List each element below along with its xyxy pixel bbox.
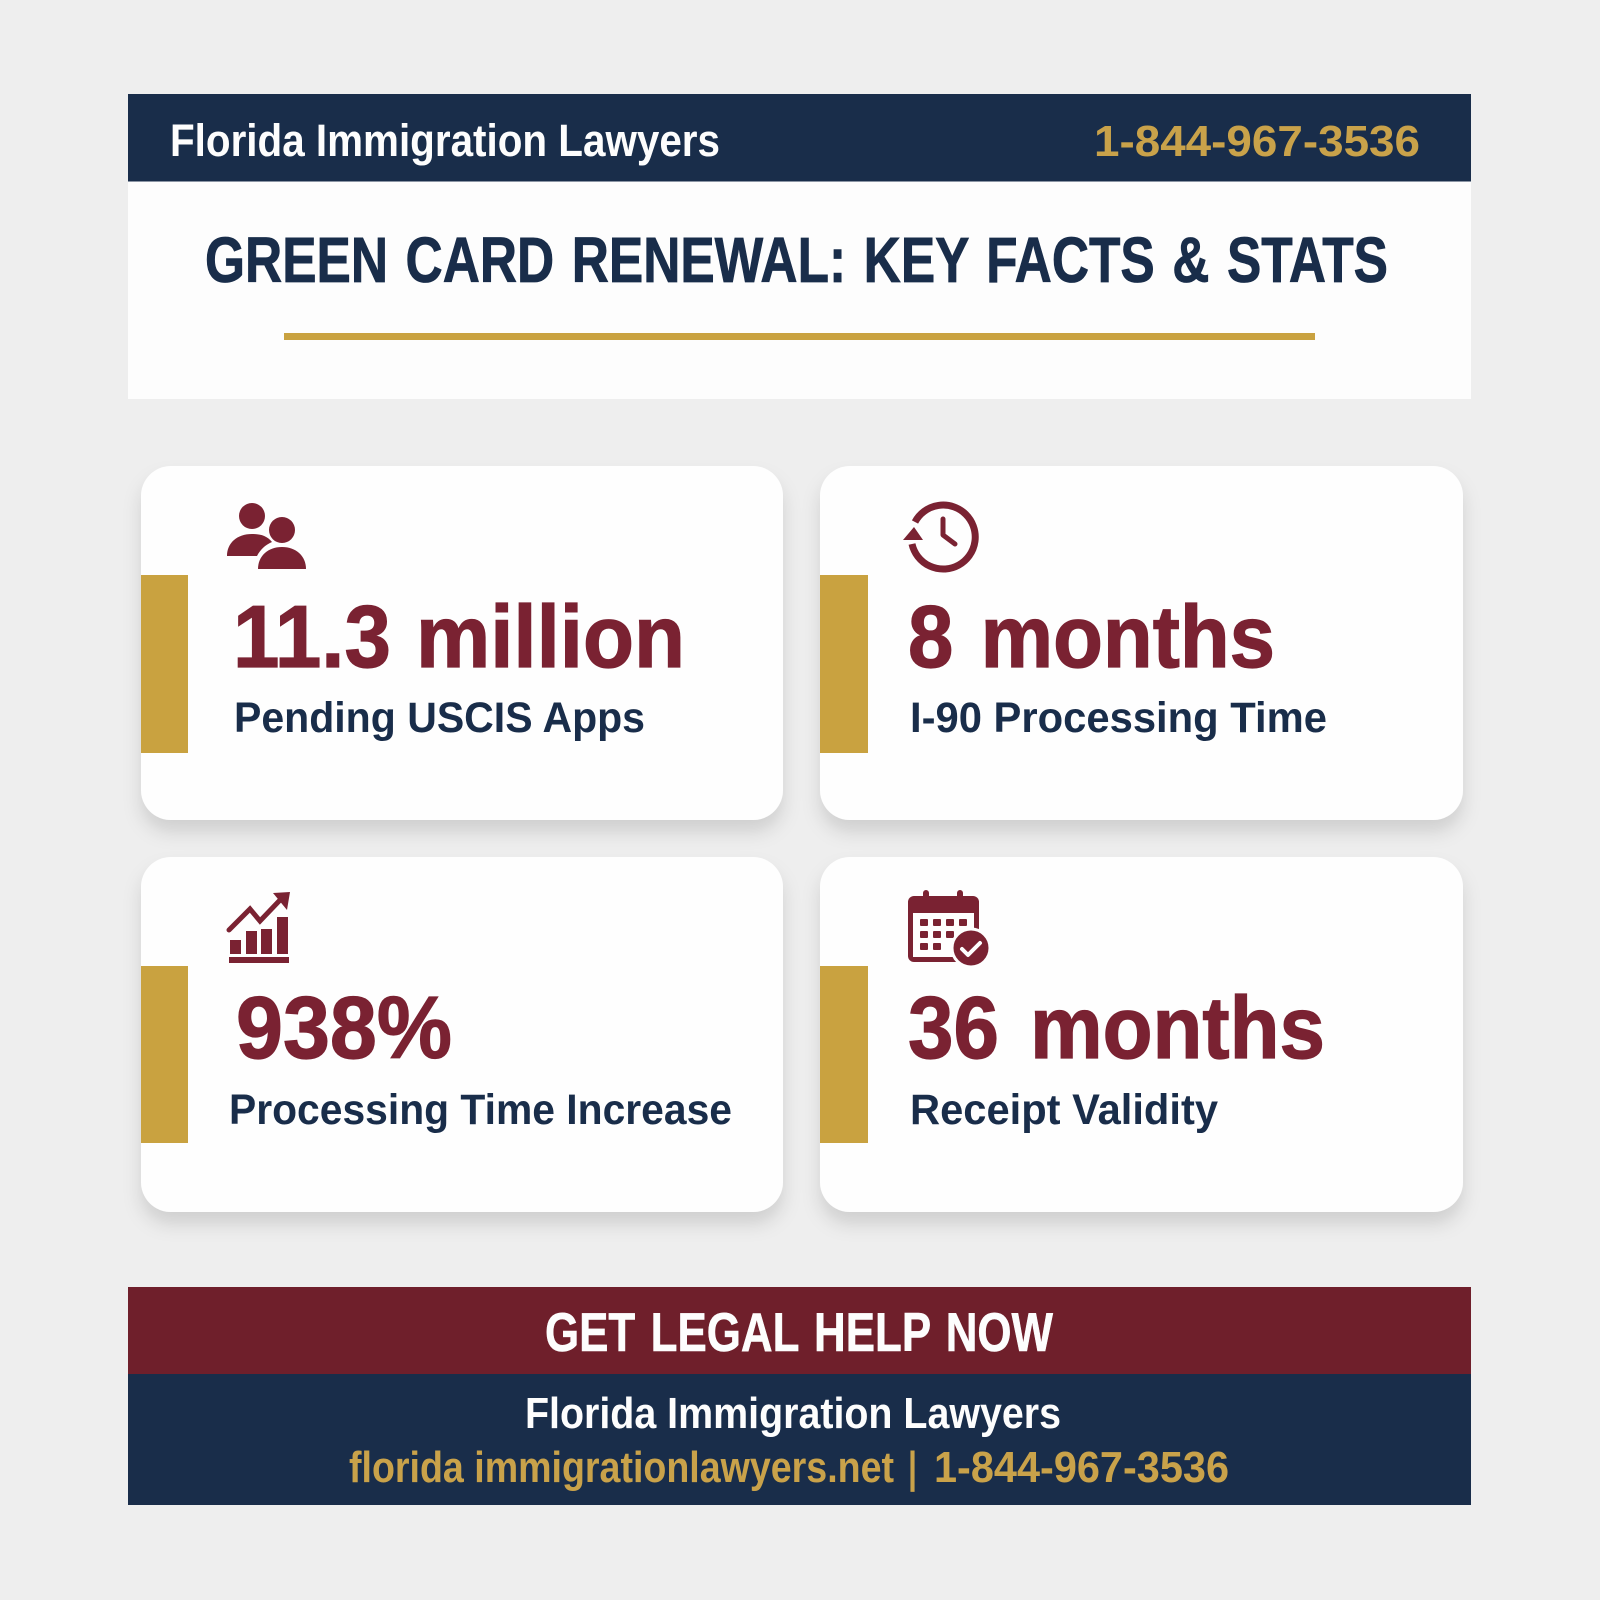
icon: people <box>227 503 306 569</box>
title underline <box>284 333 1315 340</box>
footer call to action <box>128 1287 1471 1505</box>
card: pending apps <box>141 466 783 820</box>
header bar <box>128 94 1471 182</box>
label: Processing Time Increase <box>229 1086 732 1134</box>
label: Receipt Validity <box>910 1086 1218 1134</box>
label: I-90 Processing Time <box>910 694 1327 742</box>
firm name: Florida Immigration Lawyers <box>525 1389 1061 1438</box>
contact line: | <box>908 1443 917 1493</box>
firm name: Florida Immigration Lawyers <box>170 115 720 166</box>
card: time increase <box>141 857 783 1212</box>
card: receipt validity <box>820 857 1463 1212</box>
stat: 11.3 million <box>233 587 685 686</box>
phone number: 1-844-967-3536 <box>1094 117 1420 166</box>
title panel <box>128 182 1471 399</box>
label: Pending USCIS Apps <box>234 694 645 742</box>
icon: calendar with check <box>908 890 990 967</box>
stat: 36 months <box>908 978 1325 1077</box>
stat: 938% <box>236 978 452 1077</box>
contact line: 1-844-967-3536 <box>934 1443 1229 1492</box>
top header panel <box>128 94 1471 182</box>
cta heading: GET LEGAL HELP NOW <box>545 1301 1053 1363</box>
card: processing time <box>820 466 1463 820</box>
navy band <box>128 1374 1471 1505</box>
red band <box>128 1287 1471 1374</box>
icon: rising chart <box>229 892 290 963</box>
stat: 8 months <box>908 587 1275 686</box>
icon: clock with arrow <box>903 505 975 569</box>
contact line: florida immigrationlawyers.net <box>349 1443 894 1492</box>
